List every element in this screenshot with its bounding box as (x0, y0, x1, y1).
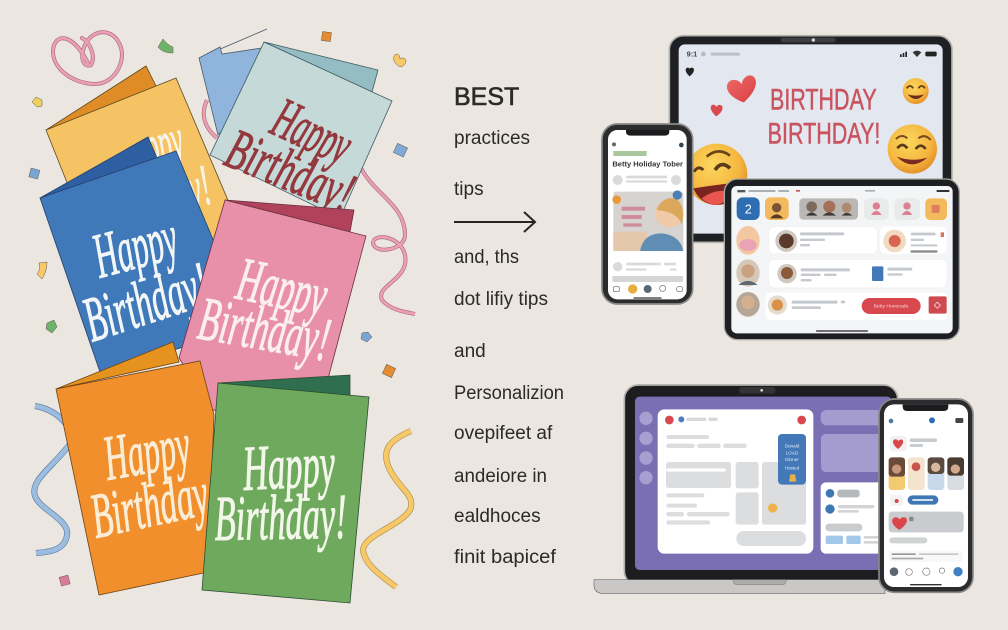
heading: BEST (454, 83, 519, 111)
device: large tablet (669, 36, 952, 242)
phone heading: Betty Holiday Tober (612, 159, 683, 168)
card text: teal: Birthday! (217, 116, 364, 226)
phone list row (613, 175, 681, 185)
avatars column (736, 226, 760, 317)
phone photo (612, 190, 683, 251)
card text: blue (74, 201, 218, 355)
emoji: tongue out (686, 144, 747, 205)
card text: pink: Birthday! (194, 285, 335, 375)
card text: pink: Happy (231, 245, 334, 330)
phone heading (612, 151, 683, 168)
blue popup: Dinner (785, 457, 799, 462)
panel: laptop and phone mockups (594, 385, 973, 594)
sidebar dots (639, 412, 653, 484)
ribbon: blue (34, 406, 70, 553)
device: phone (602, 124, 693, 304)
panel: text column (454, 83, 564, 568)
title: BIRTHDAY: BIRTHDAY (770, 83, 877, 116)
panel: tablet and phone mockups (602, 36, 959, 340)
laptop base (594, 580, 885, 594)
device: phone (879, 399, 973, 592)
text: tips: tips (454, 179, 484, 200)
emoji: small smile (903, 78, 929, 104)
card text: green: Happy (240, 428, 337, 504)
text: and: and (454, 341, 486, 362)
text: finit bapicef: finit bapicef (454, 547, 557, 568)
list card 2 (880, 227, 947, 254)
blue popup: Donald (785, 443, 800, 448)
status bar (737, 190, 949, 192)
blue popup: LOAD (786, 450, 799, 455)
blue popup: Hosted (785, 466, 800, 471)
phone top icons (889, 417, 963, 423)
icon: big heart (727, 75, 756, 102)
text: ealdhoces: ealdhoces (454, 506, 541, 527)
card: teal (210, 42, 392, 226)
text: dot lifiy tips: dot lifiy tips (454, 289, 548, 310)
phone button row (890, 495, 938, 506)
card: light blue back (199, 29, 267, 135)
right panels (821, 410, 884, 554)
title: BIRTHDAY!: BIRTHDAY! (768, 117, 880, 150)
card text: orange (84, 409, 215, 552)
list card 4 with button (766, 293, 947, 320)
ribbon: pink small (204, 100, 217, 138)
phone gray card (889, 512, 964, 532)
ribbon: pink loop (53, 32, 122, 84)
card text: yellow fragment: ppy (135, 106, 190, 179)
card text: yellow fragment (135, 106, 218, 221)
card: pink (179, 200, 366, 420)
card: yellow (46, 66, 230, 260)
main window (658, 409, 813, 554)
emoji: big smile (888, 124, 937, 174)
device: laptop (594, 385, 898, 594)
card text: blue: Happy (85, 201, 185, 292)
list card 1 (768, 227, 878, 254)
card: green (202, 375, 369, 603)
phone nav bar (613, 284, 683, 299)
card text: teal (217, 85, 364, 226)
card: blue (40, 137, 232, 372)
phone heart row (890, 436, 937, 451)
icon row: 2 (745, 203, 752, 217)
card text: green (214, 428, 347, 554)
status bar (687, 50, 937, 59)
text: and, ths: and, ths (454, 247, 519, 268)
card text: blue: Birthday! (74, 248, 218, 355)
card: orange (56, 342, 215, 595)
card text: teal: Happy (262, 85, 363, 178)
status bar: 9:1 (687, 50, 697, 59)
card text: green: Birthday! (214, 481, 347, 554)
list card 3 (768, 259, 947, 288)
blue popup (778, 434, 806, 485)
phone photo tiles (889, 457, 964, 490)
card text: orange: Birthday (84, 458, 215, 552)
text: practices: practices (454, 128, 530, 149)
text: ovepifeet af: ovepifeet af (454, 423, 553, 444)
panel: birthday cards illustration (29, 29, 415, 603)
text: Personalizion: Personalizion (454, 383, 564, 404)
arrow (454, 212, 535, 232)
icon: dark heart (686, 68, 694, 76)
card text: orange: Happy (98, 409, 195, 494)
text: andeiore in: andeiore in (454, 466, 547, 487)
icon: small heart (711, 105, 723, 116)
phone list row 2 (612, 262, 683, 282)
list card 4 with button: Betty Honorado (874, 304, 909, 310)
ribbon: pink right (361, 168, 415, 314)
phone lines (889, 537, 963, 562)
icon: emoji (768, 503, 777, 513)
card text: pink (194, 245, 335, 375)
phone nav bar (890, 567, 963, 585)
card text: yellow fragment: y! (177, 152, 218, 221)
icon row (737, 197, 947, 220)
confetti (29, 31, 408, 586)
ribbon: yellow (363, 431, 411, 587)
device: small tablet (724, 179, 959, 340)
